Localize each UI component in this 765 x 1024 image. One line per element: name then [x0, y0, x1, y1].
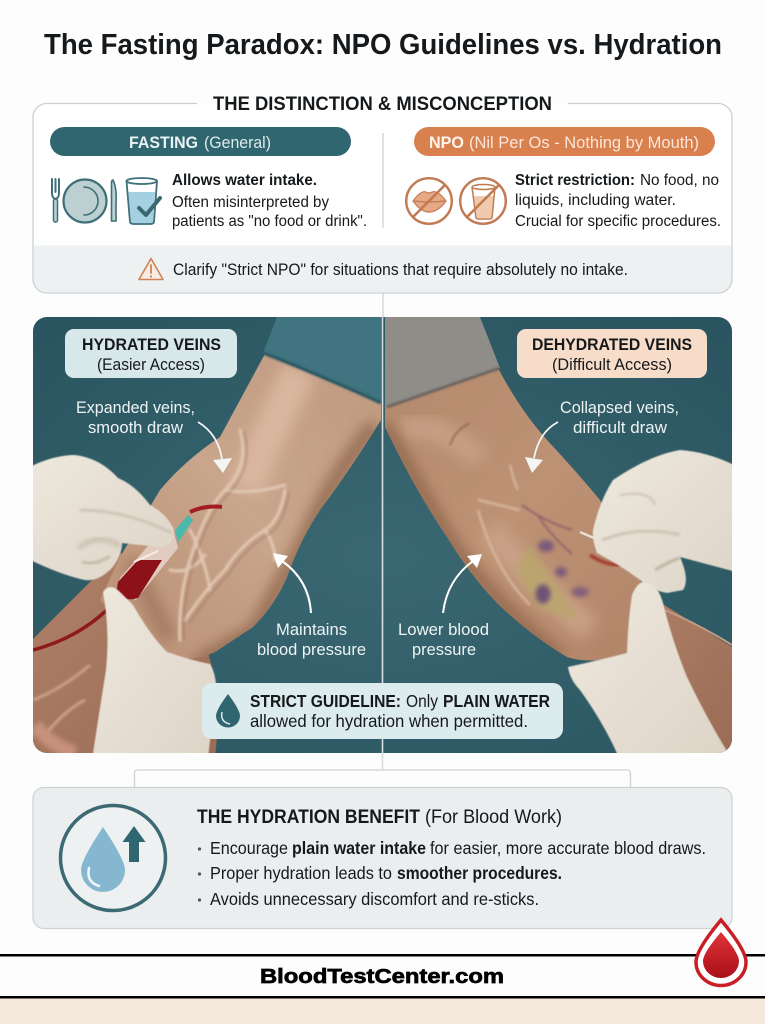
text: NPO description — [515, 172, 721, 230]
annotation: expanded veins: smooth draw — [88, 418, 184, 437]
bullet list: for easier, more accurate blood draws. — [430, 838, 706, 858]
pill: NPO: NPO — [429, 133, 464, 152]
callout: clarify strict NPO: Clarify "Strict NPO" for situations that require absolutely no intake. — [173, 261, 628, 279]
bullet list — [198, 838, 706, 909]
sleeve: teal — [263, 317, 381, 403]
annotation: expanded veins — [76, 398, 195, 437]
icon: no mouth — [406, 178, 452, 224]
annotation: maintains blood pressure — [257, 620, 366, 659]
label: dehydrated veins — [517, 329, 707, 378]
pill: fasting: (General) — [204, 133, 271, 152]
panel: vein comparison — [20, 317, 740, 770]
text: NPO description: Strict restriction: — [515, 172, 635, 189]
text: fasting description — [172, 172, 367, 230]
callout: strict guideline: Only — [406, 691, 438, 711]
gloved hand lower — [568, 582, 728, 760]
annotation: lower blood pressure — [398, 620, 489, 659]
label: dehydrated veins: (Difficult Access) — [552, 356, 672, 374]
pill: NPO — [414, 127, 715, 156]
arrow: lower blood pressure — [443, 554, 482, 613]
label: hydrated veins — [65, 329, 237, 378]
pill: fasting: FASTING — [129, 133, 198, 152]
footer — [0, 920, 765, 1024]
connector bracket — [134, 770, 630, 788]
callout: strict guideline: STRICT GUIDELINE: — [250, 691, 401, 711]
annotation: collapsed veins: Collapsed veins, — [560, 398, 679, 417]
gloved hand lower — [92, 587, 216, 760]
gloved hand upper — [20, 455, 174, 580]
heading: hydration benefit: (For Blood Work) — [425, 807, 562, 828]
forearm lower — [33, 552, 217, 753]
sleeve: gray — [385, 317, 500, 410]
annotation: maintains blood pressure: Maintains — [276, 620, 347, 639]
callout: strict guideline: PLAIN WATER — [443, 691, 550, 711]
bullet list: Avoids unnecessary discomfort and re-sticks. — [210, 889, 539, 909]
icon: water drop with up arrow — [60, 806, 166, 910]
text: NPO description: No food, no — [640, 172, 719, 189]
center divider — [382, 317, 384, 770]
pill: fasting — [50, 127, 351, 156]
label: hydrated veins: HYDRATED VEINS — [82, 335, 221, 354]
tendons — [478, 465, 530, 605]
icon: blood drop logo — [696, 920, 746, 985]
text: fasting description: Often misinterpreted by — [172, 194, 329, 211]
text: fasting description: Allows water intake. — [172, 172, 317, 189]
arrow: maintains blood pressure — [273, 553, 311, 613]
gloved hand upper — [593, 450, 740, 593]
icon: no drinking — [460, 178, 506, 224]
icon: warning triangle — [139, 258, 163, 280]
callout: strict guideline — [202, 683, 563, 739]
footer brand: BloodTestCenter.com — [260, 965, 504, 988]
icon: fork, plate, knife — [52, 179, 116, 222]
annotation: collapsed veins: difficult draw — [573, 418, 668, 437]
heading: hydration benefit — [197, 807, 562, 828]
arm — [100, 352, 381, 659]
needle tube and blood — [33, 608, 106, 652]
arrow: expanded veins — [198, 422, 232, 473]
bullet list: Proper hydration leads to — [210, 863, 392, 883]
panel: the hydration benefit — [33, 788, 732, 928]
title: The Fasting Paradox: NPO Guidelines vs. Hydration — [44, 29, 722, 61]
photo: dehydrated arm — [385, 317, 740, 760]
annotation: lower blood pressure: pressure — [412, 640, 476, 659]
text: fasting description: patients as "no food or drink". — [172, 213, 367, 230]
veins — [170, 430, 285, 640]
callout: strict guideline: allowed for hydration when permitted. — [250, 711, 528, 731]
annotation: lower blood pressure: Lower blood — [398, 620, 489, 639]
bullet list: Encourage — [210, 838, 288, 858]
icon: water drop — [216, 694, 240, 728]
annotation: collapsed veins — [560, 398, 679, 437]
photo: hydrated arm — [20, 317, 740, 760]
label: dehydrated veins: DEHYDRATED VEINS — [532, 335, 692, 354]
label: hydrated veins: (Easier Access) — [97, 356, 205, 374]
arrow: collapsed veins — [525, 422, 558, 473]
pill: NPO: (Nil Per Os - Nothing by Mouth) — [469, 133, 699, 152]
bullet list: smoother procedures. — [397, 863, 562, 883]
bruises — [515, 540, 589, 620]
heading: hydration benefit: THE HYDRATION BENEFIT — [197, 807, 420, 828]
text: NPO description: Crucial for specific procedures. — [515, 213, 721, 230]
annotation: expanded veins: Expanded veins, — [76, 398, 195, 417]
text: NPO description: liquids, including water. — [515, 192, 676, 209]
icon: glass of water with check — [126, 178, 160, 224]
section heading: THE DISTINCTION & MISCONCEPTION — [213, 93, 552, 115]
annotation: maintains blood pressure: blood pressure — [257, 640, 366, 659]
panel: the distinction and misconception — [33, 93, 732, 317]
bullet list: plain water intake — [292, 838, 426, 858]
